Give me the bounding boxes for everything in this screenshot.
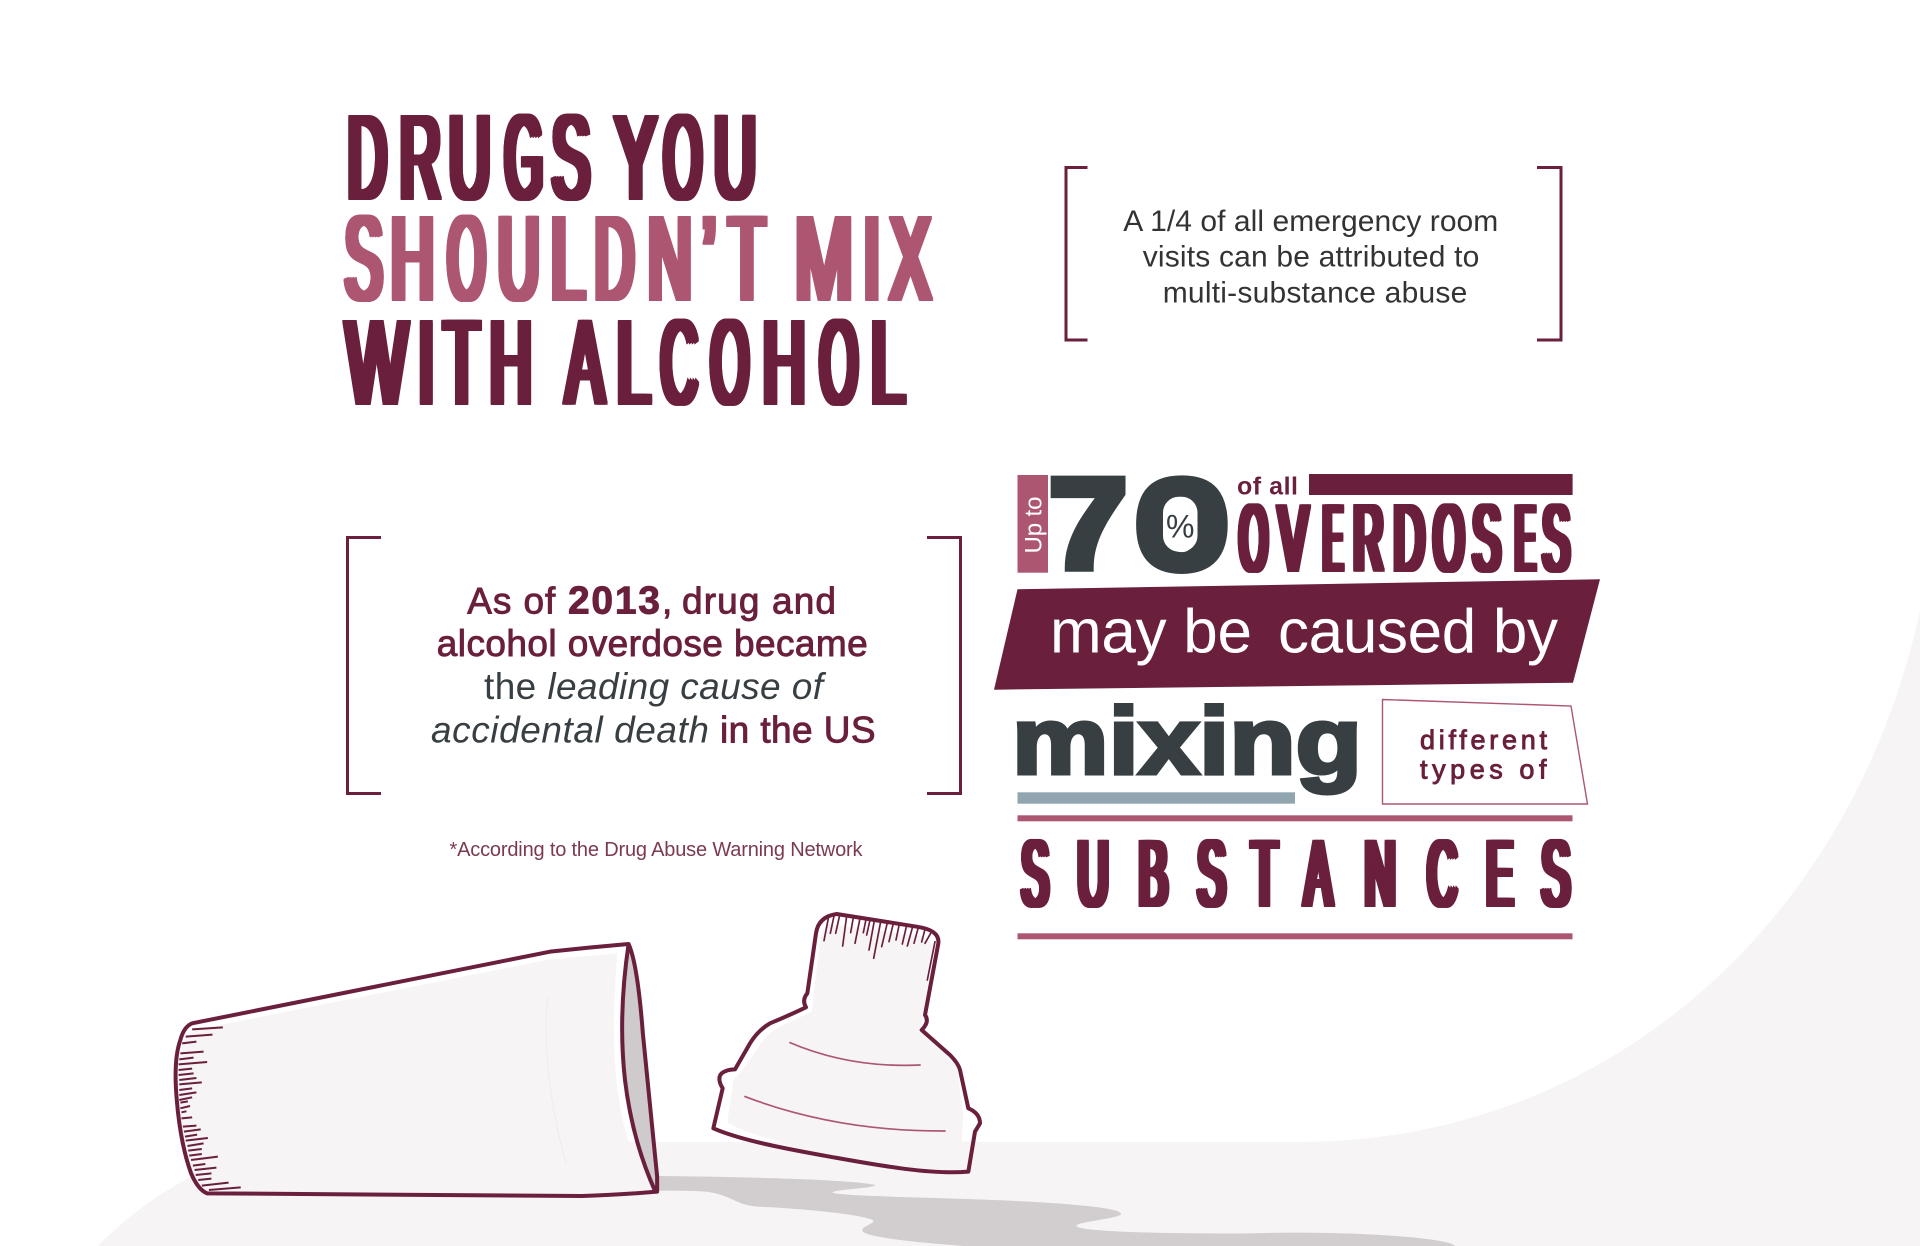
word: substances: U [1074,821,1104,927]
title line 1: Y [611,89,652,225]
bar beside of all [1309,474,1573,495]
rule below substances [1018,933,1572,939]
title: drugs you shouldn't mix with alcohol [341,89,934,430]
word: overdoses: S [1539,485,1566,592]
underline bar under mixing [1018,792,1295,804]
word: substances: T [1248,821,1273,927]
word: overdoses: D [1390,485,1420,592]
title line 2: U [494,190,536,326]
word: substances: C [1424,821,1453,927]
banner: may be caused by: caused by [1278,597,1558,666]
word: mixing: mixing [1012,688,1362,794]
title line 2: I [860,190,876,326]
callout: leading cause of accidental death: the leading cause of [484,666,827,707]
banner: may be caused by [994,579,1600,690]
box: different types of [1382,700,1588,804]
illustration: tipped cup [176,944,657,1196]
bracket: left callout [348,538,960,794]
word: overdoses: O [1236,485,1264,592]
title line 2: D [591,190,630,326]
bracket: top right callout [1066,168,1561,340]
label box: Up to: Up to [1020,496,1048,554]
title line 3: L [613,294,647,430]
word: substances: S [1538,821,1566,927]
title line 1: G [501,89,538,225]
word: overdoses: O [1430,485,1460,592]
illustration: bottle cap [713,914,980,1172]
callout: emergency room visits: A 1/4 of all emergency room [1123,205,1498,238]
banner: may be caused by: may be [1050,597,1252,666]
title line 3: L [867,294,901,430]
title line 2: O [444,190,481,326]
callout: leading cause of accidental death: drug and [682,580,836,621]
callout: leading cause of accidental death: in the US [720,710,876,751]
title line 1: O [660,89,697,225]
word: substances [1018,821,1572,927]
title line 3: O [816,294,853,430]
word: overdoses: S [1469,485,1497,592]
word: substances: E [1483,821,1509,927]
big number 70 percent: 7 [1049,452,1127,595]
big number 70 percent [1049,452,1229,596]
title line 1: R [396,89,436,225]
callout: emergency room visits: multi-substance abuse [1163,277,1467,310]
title line 1: S [548,89,586,225]
word: overdoses: V [1274,485,1303,592]
word: overdoses: E [1512,485,1531,592]
of all: of all [1237,472,1298,500]
callout: leading cause of accidental death: 2013 [568,579,660,622]
callout: leading cause of accidental death: alcohol overdose became [437,623,868,664]
word: substances: S [1018,821,1044,927]
big number 70 percent: % [1166,508,1194,544]
box: different types of: types of [1420,754,1547,784]
title line 2 [341,190,934,326]
background floor and curve [98,611,1920,1246]
title line 2: H [387,190,430,326]
title line 3: A [562,294,600,430]
callout: leading cause of accidental death: As of [467,580,556,621]
title line 1 [344,89,756,225]
title line 2: N [644,190,687,326]
title line 3: H [759,294,801,430]
big number 70 percent: 0 [1135,453,1229,596]
title line 3: O [707,294,745,430]
rule above substances [1018,815,1572,821]
word: overdoses [1236,485,1572,592]
title line 3: H [486,294,527,430]
word: substances: B [1135,821,1164,927]
title line 1: U [710,89,752,225]
liquid puddle [656,1176,1455,1246]
callout: leading cause of accidental death [431,579,876,751]
footnote: *According to the Drug Abuse Warning Network [450,839,864,861]
title line 1: U [445,89,487,225]
title line 3: T [440,294,475,430]
title line 3: W [342,294,404,430]
callout: emergency room visits [1123,205,1498,310]
title line 2: T [725,190,761,326]
title line 3 [342,294,907,430]
title line 1: D [344,89,383,225]
word: overdoses: E [1320,485,1338,592]
title line 3: I [415,294,430,430]
word: overdoses: R [1350,485,1380,592]
title line 2: S [341,190,379,326]
title line 2: M [791,190,849,326]
word: substances: A [1301,821,1328,927]
title line 2: L [547,190,580,326]
word: substances: N [1360,821,1391,927]
title line 2: X [886,190,927,326]
callout: emergency room visits: visits can be attributed to [1143,241,1479,274]
word: substances: S [1194,821,1221,927]
callout: leading cause of accidental death: accidental death [431,710,709,751]
label box: Up to [1018,475,1048,573]
box: different types of: different [1420,725,1547,755]
title line 3: C [657,294,693,430]
callout: leading cause of accidental death: , [662,580,672,621]
title line 2: ’ [699,190,711,326]
